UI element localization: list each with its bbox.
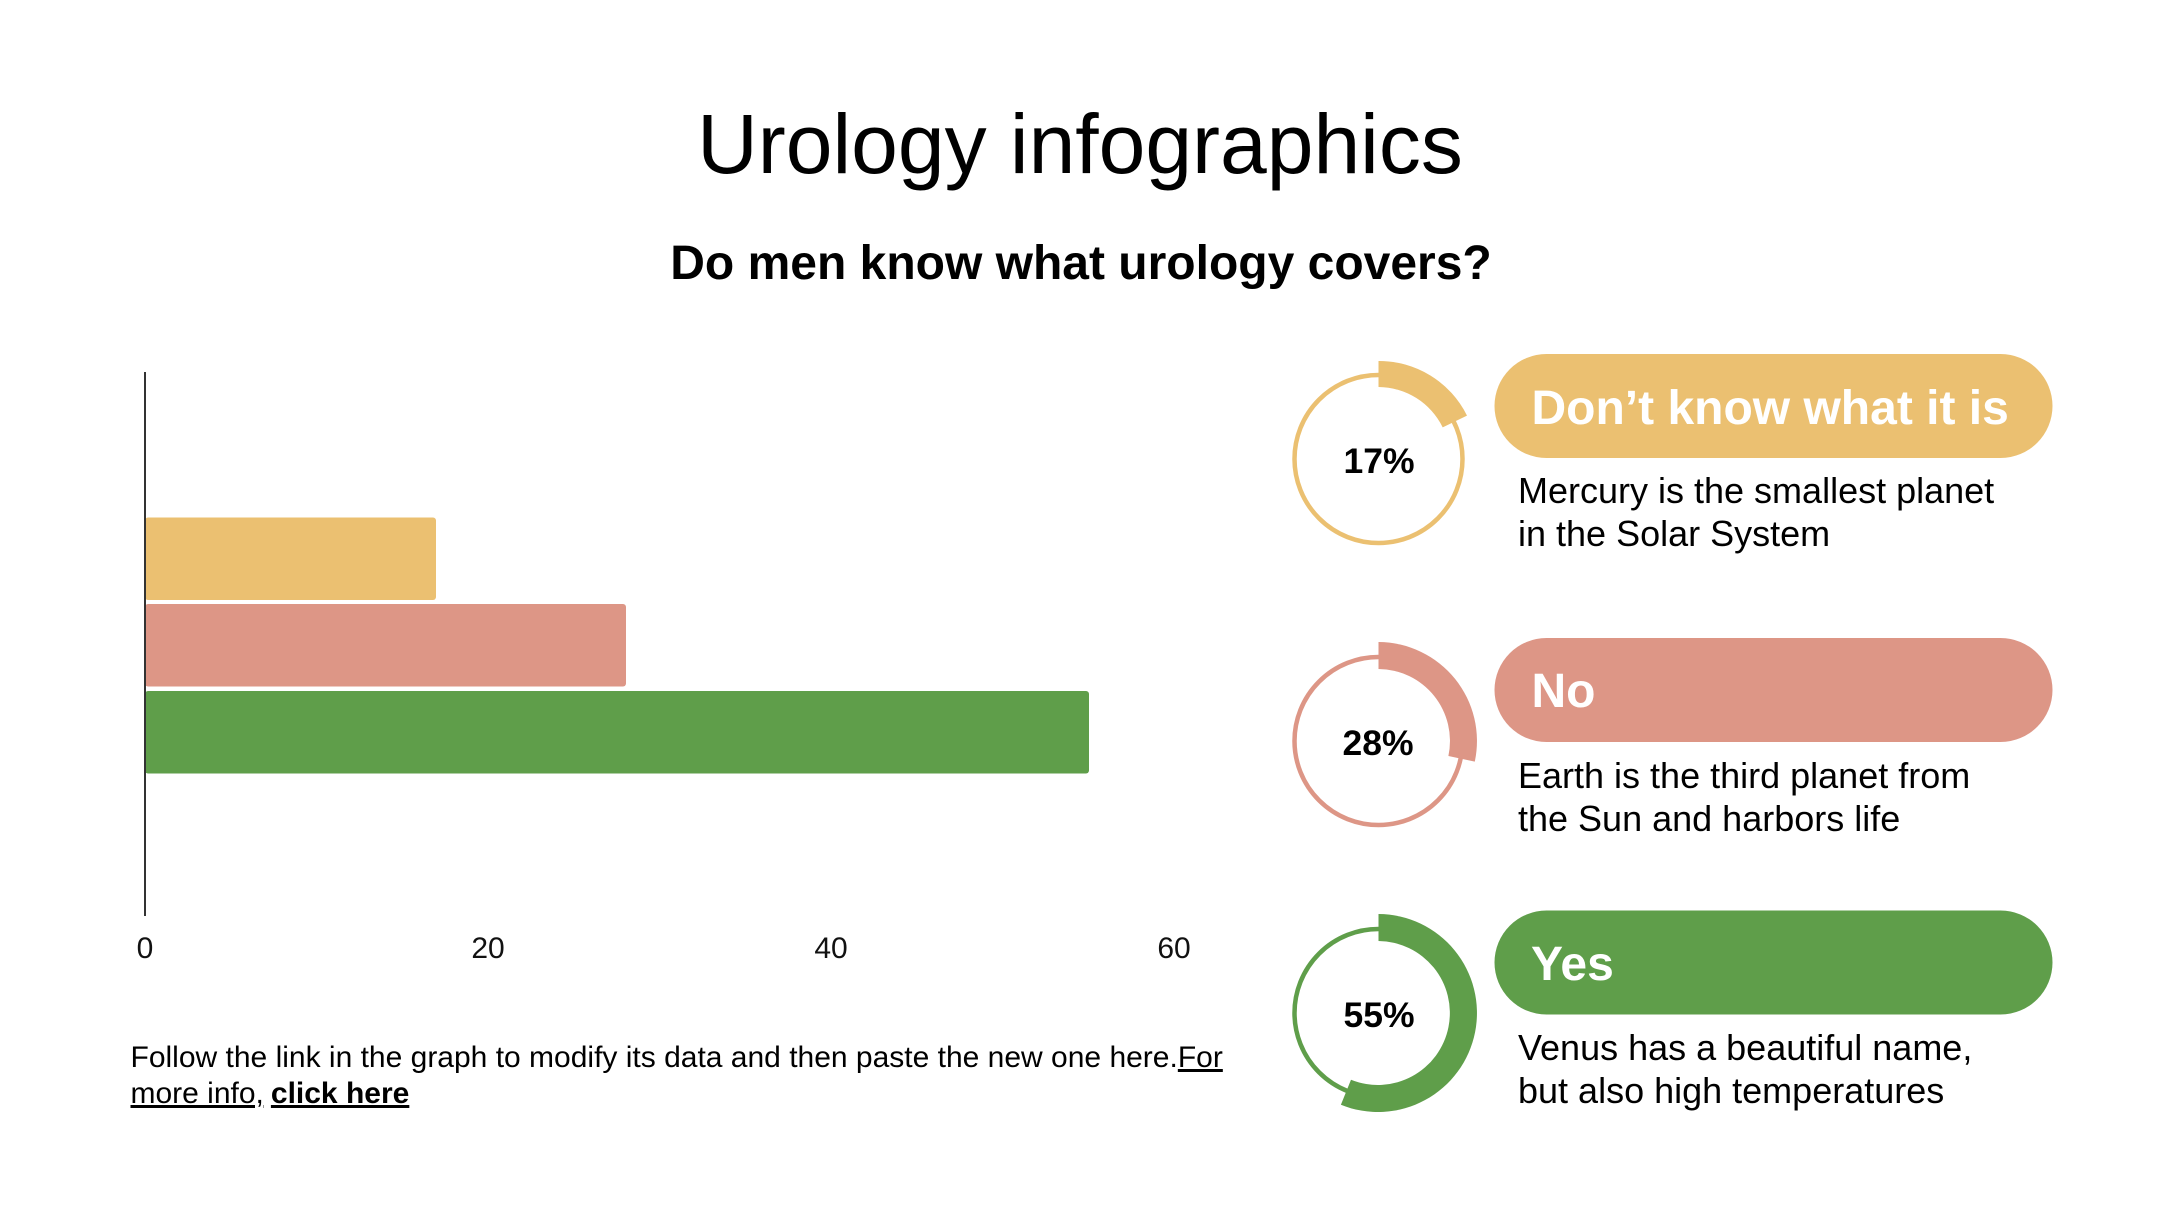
item: no — [1294, 638, 2052, 839]
axis labels: 0 — [137, 932, 153, 965]
bar chart — [137, 372, 1191, 965]
donut 17%: 17% — [1343, 441, 1415, 481]
footer note: click here — [271, 1077, 409, 1110]
pill label — [1494, 354, 2052, 458]
subtitle: Do men know what urology covers? — [670, 237, 1492, 290]
bar: Don't know what it is 17 — [145, 518, 436, 600]
pill text: Yes — [1531, 938, 1614, 991]
footer note: more info, — [130, 1077, 264, 1110]
donut 55% — [1294, 914, 1477, 1112]
item: don't know — [1294, 354, 2052, 554]
axis labels: 20 — [471, 932, 505, 965]
pill text: No — [1532, 665, 1595, 718]
description: Mercury is the smallest planet — [1518, 470, 1994, 511]
axis labels — [137, 932, 1191, 965]
pill label — [1494, 638, 2052, 742]
description: but also high temperatures — [1518, 1070, 1944, 1111]
pill text: Don’t know what it is — [1532, 382, 2009, 435]
bar: No 28 — [145, 604, 626, 686]
donut 17% — [1294, 361, 1467, 543]
title: Urology infographics — [697, 97, 1463, 191]
footer note: Follow the link in the graph to modify its data and then paste the new one here.For — [130, 1041, 1223, 1074]
description: the Sun and harbors life — [1518, 798, 1900, 839]
bar: Yes 55 — [145, 691, 1089, 774]
donut 28%: 28% — [1342, 723, 1414, 763]
donut 28% — [1294, 642, 1477, 825]
description: Earth is the third planet from — [1518, 755, 1970, 796]
item: yes — [1294, 910, 2052, 1112]
description: in the Solar System — [1518, 513, 1830, 554]
pill label — [1494, 910, 2052, 1014]
donut 55%: 55% — [1343, 995, 1415, 1035]
axis labels: 60 — [1157, 932, 1191, 965]
axis line — [144, 372, 146, 916]
axis labels: 40 — [814, 932, 848, 965]
description: Venus has a beautiful name, — [1518, 1027, 1972, 1068]
